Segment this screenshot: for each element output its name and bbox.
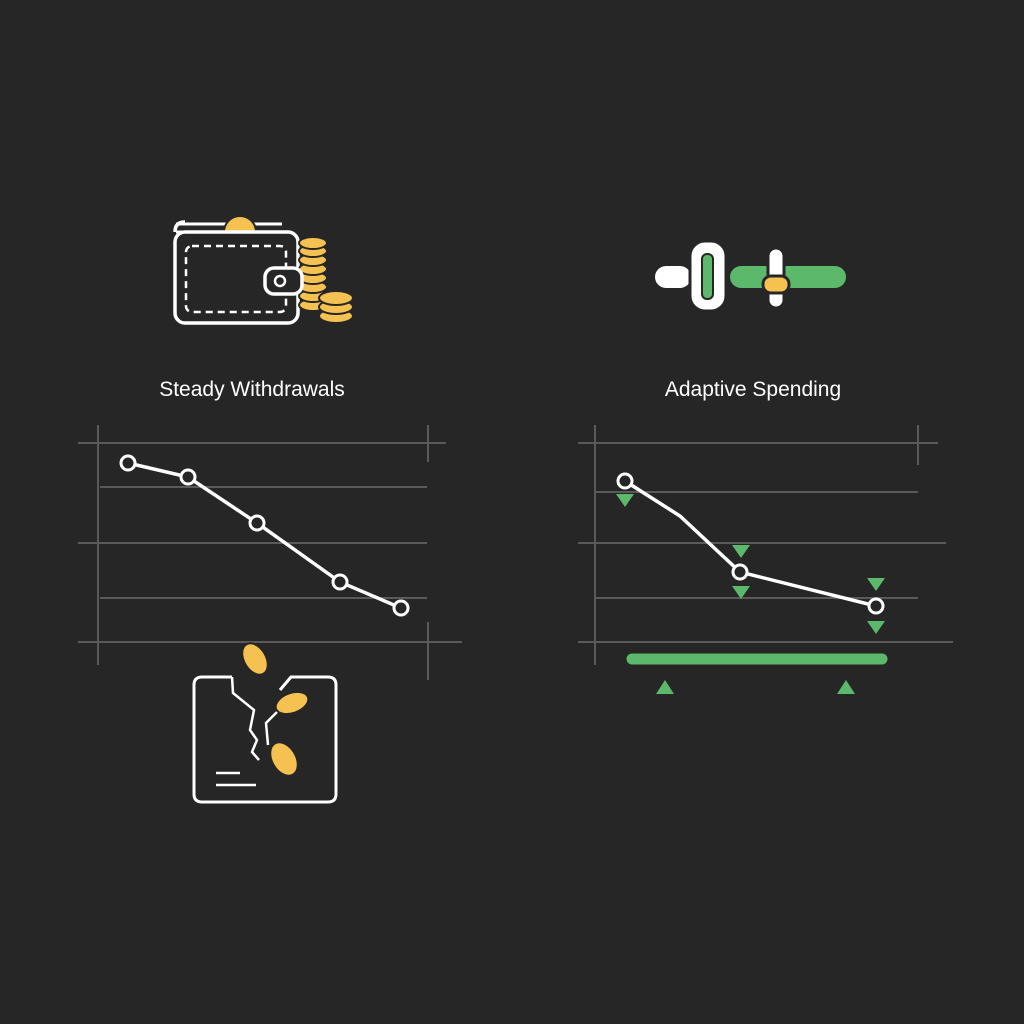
icon: sliders (655, 241, 846, 311)
icon: broken box with falling coins (194, 639, 336, 802)
icon: wallet with coins (175, 216, 353, 323)
heading: steady withdrawals: Steady Withdrawals (159, 378, 345, 401)
chart: steady withdrawals (78, 425, 462, 680)
chart: adaptive spending (578, 425, 953, 694)
heading: adaptive spending: Adaptive Spending (665, 378, 841, 401)
